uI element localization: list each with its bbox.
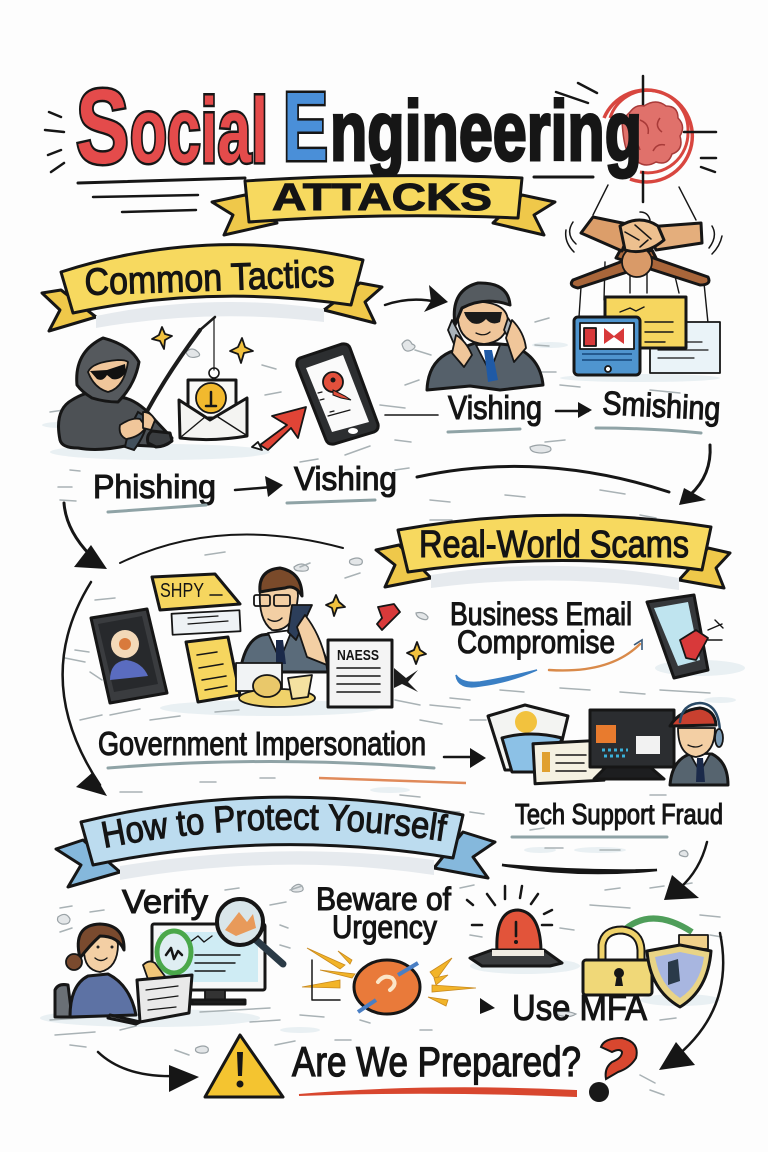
banner: How to Protect Yourself (54, 796, 496, 888)
icon: tablet with person (91, 609, 167, 703)
label: Vishing second: Vishing (294, 460, 397, 497)
icon: magnifying glass (217, 899, 283, 964)
icon: sparkles and red pin (326, 595, 426, 664)
icon: newspaper NAESS (328, 640, 418, 707)
icon: blue and orange swoosh arrow (456, 640, 642, 687)
pale document (650, 322, 720, 373)
label: Smishing: Smishing (602, 384, 721, 427)
icon: envelope with bait (179, 380, 247, 440)
banner: Common Tactics (42, 245, 382, 331)
label: Are We Prepared?: Are We Prepared? (292, 1038, 581, 1085)
icon: monitor (590, 710, 674, 779)
arrow: to scams panel (64, 503, 107, 569)
icon: green badge with hand (143, 931, 191, 985)
label: Use MFA: Use MFA (512, 987, 647, 1028)
icon: businessman on phone (240, 568, 328, 672)
icon: shield with cup (488, 705, 568, 772)
arrow: to tech support (444, 748, 486, 768)
title letter: S: S (76, 68, 129, 186)
blue tablet (574, 317, 640, 375)
icon: yellow document (186, 637, 240, 702)
banner text: How to Protect Yourself (101, 804, 449, 848)
icon: computer monitor (152, 924, 265, 1004)
icon: target with brain (604, 76, 716, 202)
icon: sparkles (152, 327, 253, 363)
arrow: to use MFA (480, 998, 495, 1014)
title word: ocial: ocial (130, 80, 268, 182)
icon: hanging screens (574, 297, 720, 375)
title word: ngineering: ngineering (330, 84, 642, 178)
label: Business Email Compromise (450, 596, 632, 660)
icon: urgency clock with rays (302, 948, 476, 1014)
icon: red arrow (252, 407, 306, 450)
arrow: down to real-world scams (417, 445, 710, 505)
icon: laptop (108, 975, 192, 1024)
arrow: vishing to smishing (556, 402, 592, 418)
icon: hooded hacker with fishing rod (58, 317, 219, 450)
arrow: to final question (659, 933, 723, 1070)
icon: newspaper NAESS: NAESS (337, 647, 379, 664)
banner: ATTACKS (212, 176, 555, 235)
banner text: Real-World Scams (419, 524, 689, 566)
icon: red siren (467, 886, 562, 966)
label: Government Impersonation: Government Impersonation (98, 725, 426, 762)
label: Beware of Urgency: Urgency (332, 909, 437, 945)
icon: red question mark (589, 1038, 637, 1102)
arrow: to protection icons (502, 842, 707, 900)
icon: tech support agent (670, 703, 728, 785)
banner text: Common Tactics (84, 253, 335, 304)
label: Beware of Urgency: Beware of (316, 881, 451, 917)
label: Vishing: Vishing (448, 389, 542, 426)
label: Business Email Compromise: Business Email (450, 596, 632, 632)
label: Tech Support Fraud: Tech Support Fraud (515, 799, 723, 831)
label: Beware of Urgency (316, 881, 451, 945)
title speed lines (45, 83, 716, 212)
icon: warning triangle (205, 1035, 283, 1097)
icon: puppet handshake (566, 185, 722, 323)
icon: status card (533, 740, 604, 784)
icon: padlock and shield (583, 918, 711, 1007)
icon: yellow SHPY note (152, 574, 240, 610)
icon: yellow SHPY note: SHPY (160, 580, 204, 602)
icon: woman at laptop (55, 924, 136, 1017)
label: Phishing: Phishing (93, 468, 216, 505)
banner: Real-World Scams (376, 515, 730, 590)
icon: phone with red bow (647, 595, 723, 678)
arrow: phishing to vishing (235, 476, 283, 497)
label: Verify: Verify (122, 883, 209, 920)
icon: phone with alert (297, 344, 378, 444)
title letter: E: E (283, 72, 328, 181)
arrow: to vishing (385, 285, 448, 312)
title (76, 68, 642, 186)
arcs: scams flow (63, 535, 343, 796)
icon: id card (172, 610, 241, 635)
icon: plate and coins (236, 663, 315, 707)
icon: man on phone call (427, 283, 543, 390)
label: Business Email Compromise: Compromise (457, 624, 615, 660)
yellow document (605, 297, 686, 348)
underline: red (299, 1088, 576, 1096)
arrow: to are we prepared (98, 1052, 199, 1092)
banner text: ATTACKS (272, 177, 492, 219)
